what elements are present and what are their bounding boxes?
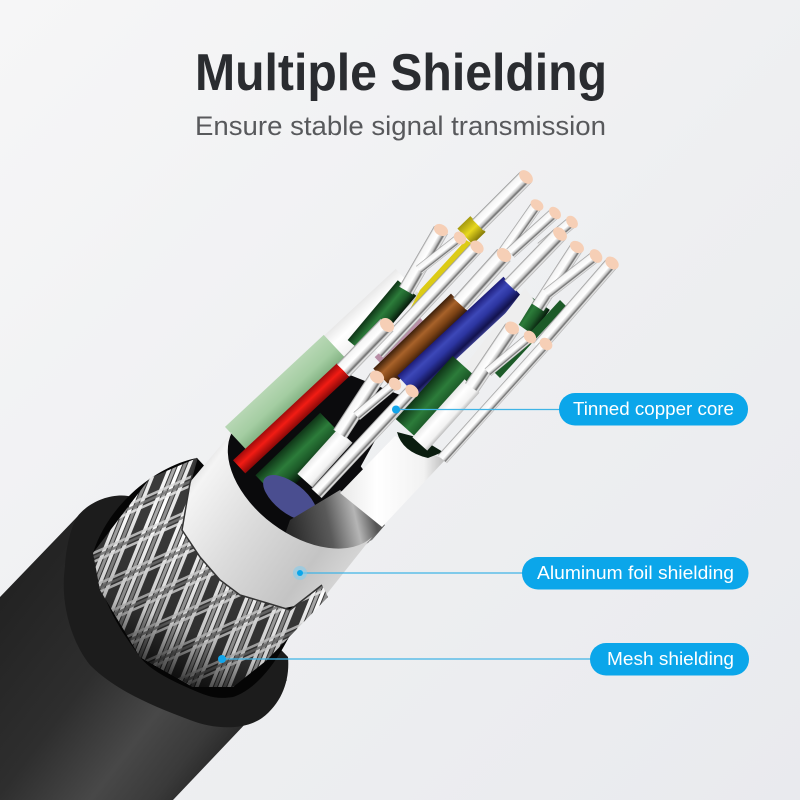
aluminum foil sleeve — [150, 432, 372, 620]
wire: upper twist A — [498, 197, 546, 257]
white sleeve: back — [323, 269, 420, 363]
wire: lower left 2 — [352, 375, 404, 422]
sleeve with green lining — [340, 356, 479, 527]
wire: upper twist B — [506, 204, 563, 258]
callout: aluminum foil shielding: Aluminum foil shielding — [537, 562, 734, 583]
subtitle: Ensure stable signal transmission — [195, 111, 606, 141]
outer black jacket — [0, 458, 320, 800]
green jacket right — [494, 296, 566, 378]
wire: left 2 — [415, 229, 469, 276]
wire: lower right 2 — [483, 328, 539, 378]
cable illustration — [0, 167, 621, 800]
dark core background — [265, 375, 400, 495]
metallic inner band — [283, 490, 385, 560]
wire: over brown — [453, 245, 515, 310]
pale white filler — [460, 288, 534, 372]
green jacket top — [348, 280, 416, 355]
callout: mesh shielding: Mesh shielding — [607, 648, 734, 669]
wire: upper twist C — [537, 213, 580, 253]
pale blue jacket — [256, 466, 324, 530]
white wire lower left — [297, 429, 352, 487]
callout: mesh shielding — [218, 643, 749, 676]
braided mesh shielding — [93, 458, 328, 687]
pink jacket — [375, 316, 429, 369]
light green jacket — [225, 335, 348, 453]
wire: lower left 1 — [333, 368, 387, 438]
wire: left long — [373, 238, 486, 358]
wire: lower right 1 — [465, 319, 522, 392]
blue jacket — [397, 277, 523, 396]
wire: left 1 — [399, 221, 451, 295]
wire: over red — [337, 314, 398, 377]
wire: lower left 3 — [311, 382, 421, 499]
brown jacket — [373, 294, 469, 387]
wire: right 3 — [533, 254, 621, 352]
inner conductors — [225, 167, 621, 560]
title: Multiple Shielding — [195, 44, 607, 102]
wire: right 2 — [543, 247, 605, 300]
dark green jacket — [255, 413, 344, 500]
callout: tinned copper core: Tinned copper core — [573, 398, 734, 419]
wire: lower right 3 — [437, 335, 555, 464]
callout: tinned copper core — [392, 393, 748, 426]
callout: aluminum foil shielding — [293, 557, 748, 590]
wire: top — [472, 167, 536, 231]
white tube lower right — [412, 379, 479, 451]
red jacket — [233, 363, 349, 473]
wire: upper centre — [504, 224, 570, 291]
wire: right 1 — [531, 238, 586, 311]
yellow jacket — [407, 216, 486, 328]
foil interior opening — [199, 388, 405, 582]
